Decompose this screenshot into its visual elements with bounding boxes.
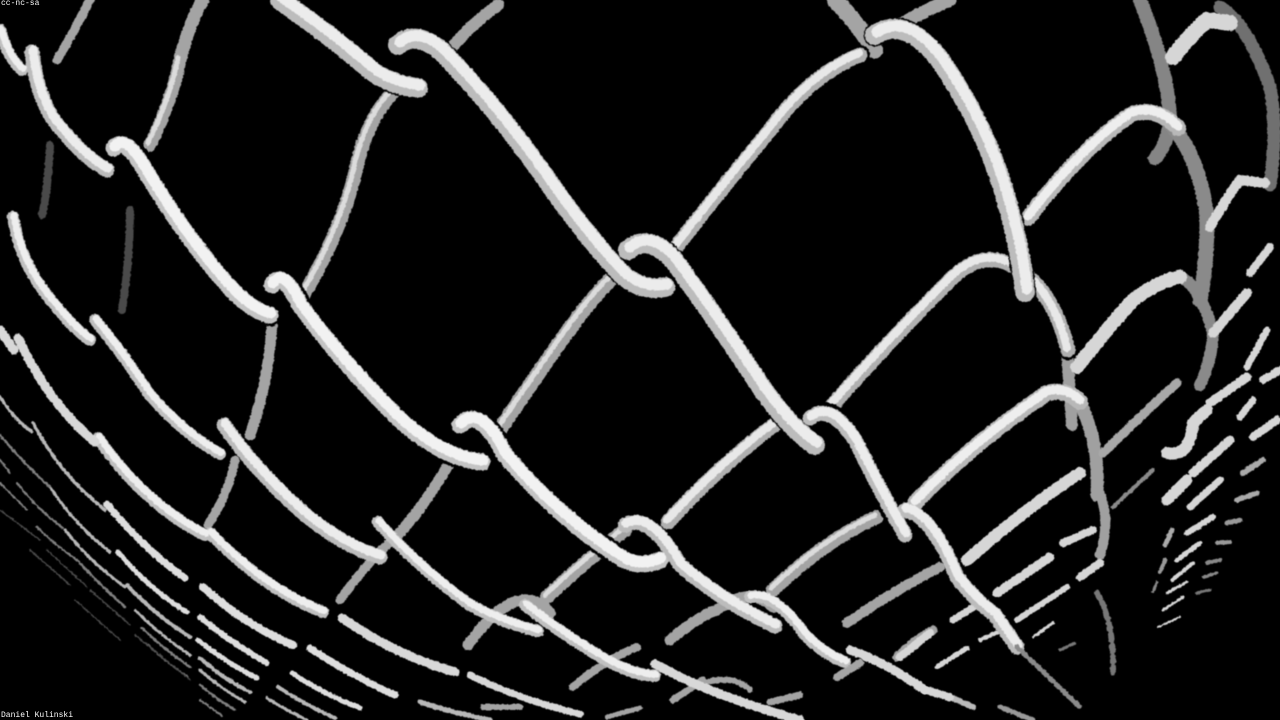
wires: rising wires behind the fence <box>57 0 950 717</box>
wires: far-right receding mesh <box>900 20 1280 720</box>
credit: photographer: Daniel Kulinski <box>1 711 73 720</box>
wires: bottom-left tapered rows <box>0 397 490 720</box>
